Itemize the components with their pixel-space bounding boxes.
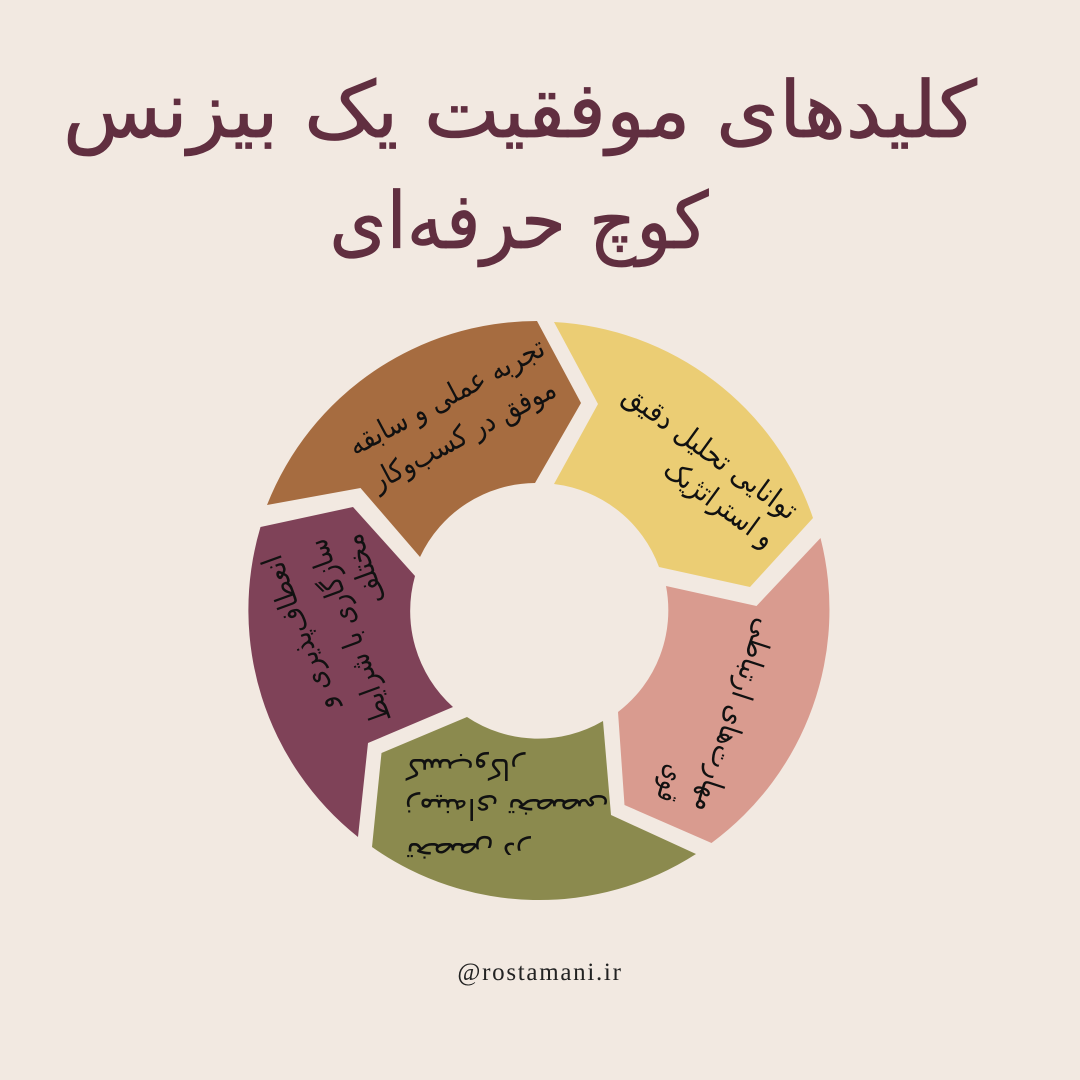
segment: analytical ability [554, 322, 813, 587]
segment: specialised knowledge: زمینه‌ای تخصصی [405, 792, 609, 826]
footer handle: @rostamani.ir [457, 959, 623, 986]
segment: specialised knowledge: کسب‌وکار [405, 752, 526, 786]
donut cycle diagram [248, 321, 829, 900]
segment: communication skills [618, 538, 829, 843]
segment: flexibility and adaptability: مختلف [337, 529, 392, 609]
segment: practical experience: موفق در کسب‌وکار [364, 372, 562, 498]
segment: flexibility and adaptability: انعطاف‌پذیری و [256, 551, 344, 717]
segment: flexibility and adaptability: سازگاری با شرایط [300, 534, 398, 728]
segment: communication skills: مهارت‌های ارتباطی [688, 614, 781, 817]
segment: flexibility and adaptability [248, 507, 453, 837]
segment: analytical ability: و استراتژیک [658, 453, 781, 555]
title [63, 65, 977, 268]
segment: specialised knowledge [372, 717, 696, 900]
segment: practical experience: تجربه عملی و سابقه [343, 331, 551, 463]
segment: communication skills: قوی [649, 761, 693, 807]
segment: practical experience [267, 321, 581, 557]
title: کلیدهای موفقیت یک بیزنس [63, 65, 977, 157]
title: کوچ حرفه‌ای [329, 176, 709, 268]
segment: analytical ability: توانایی تحلیل دقیق [617, 377, 805, 527]
segment: specialised knowledge: تخصص در [406, 836, 532, 870]
